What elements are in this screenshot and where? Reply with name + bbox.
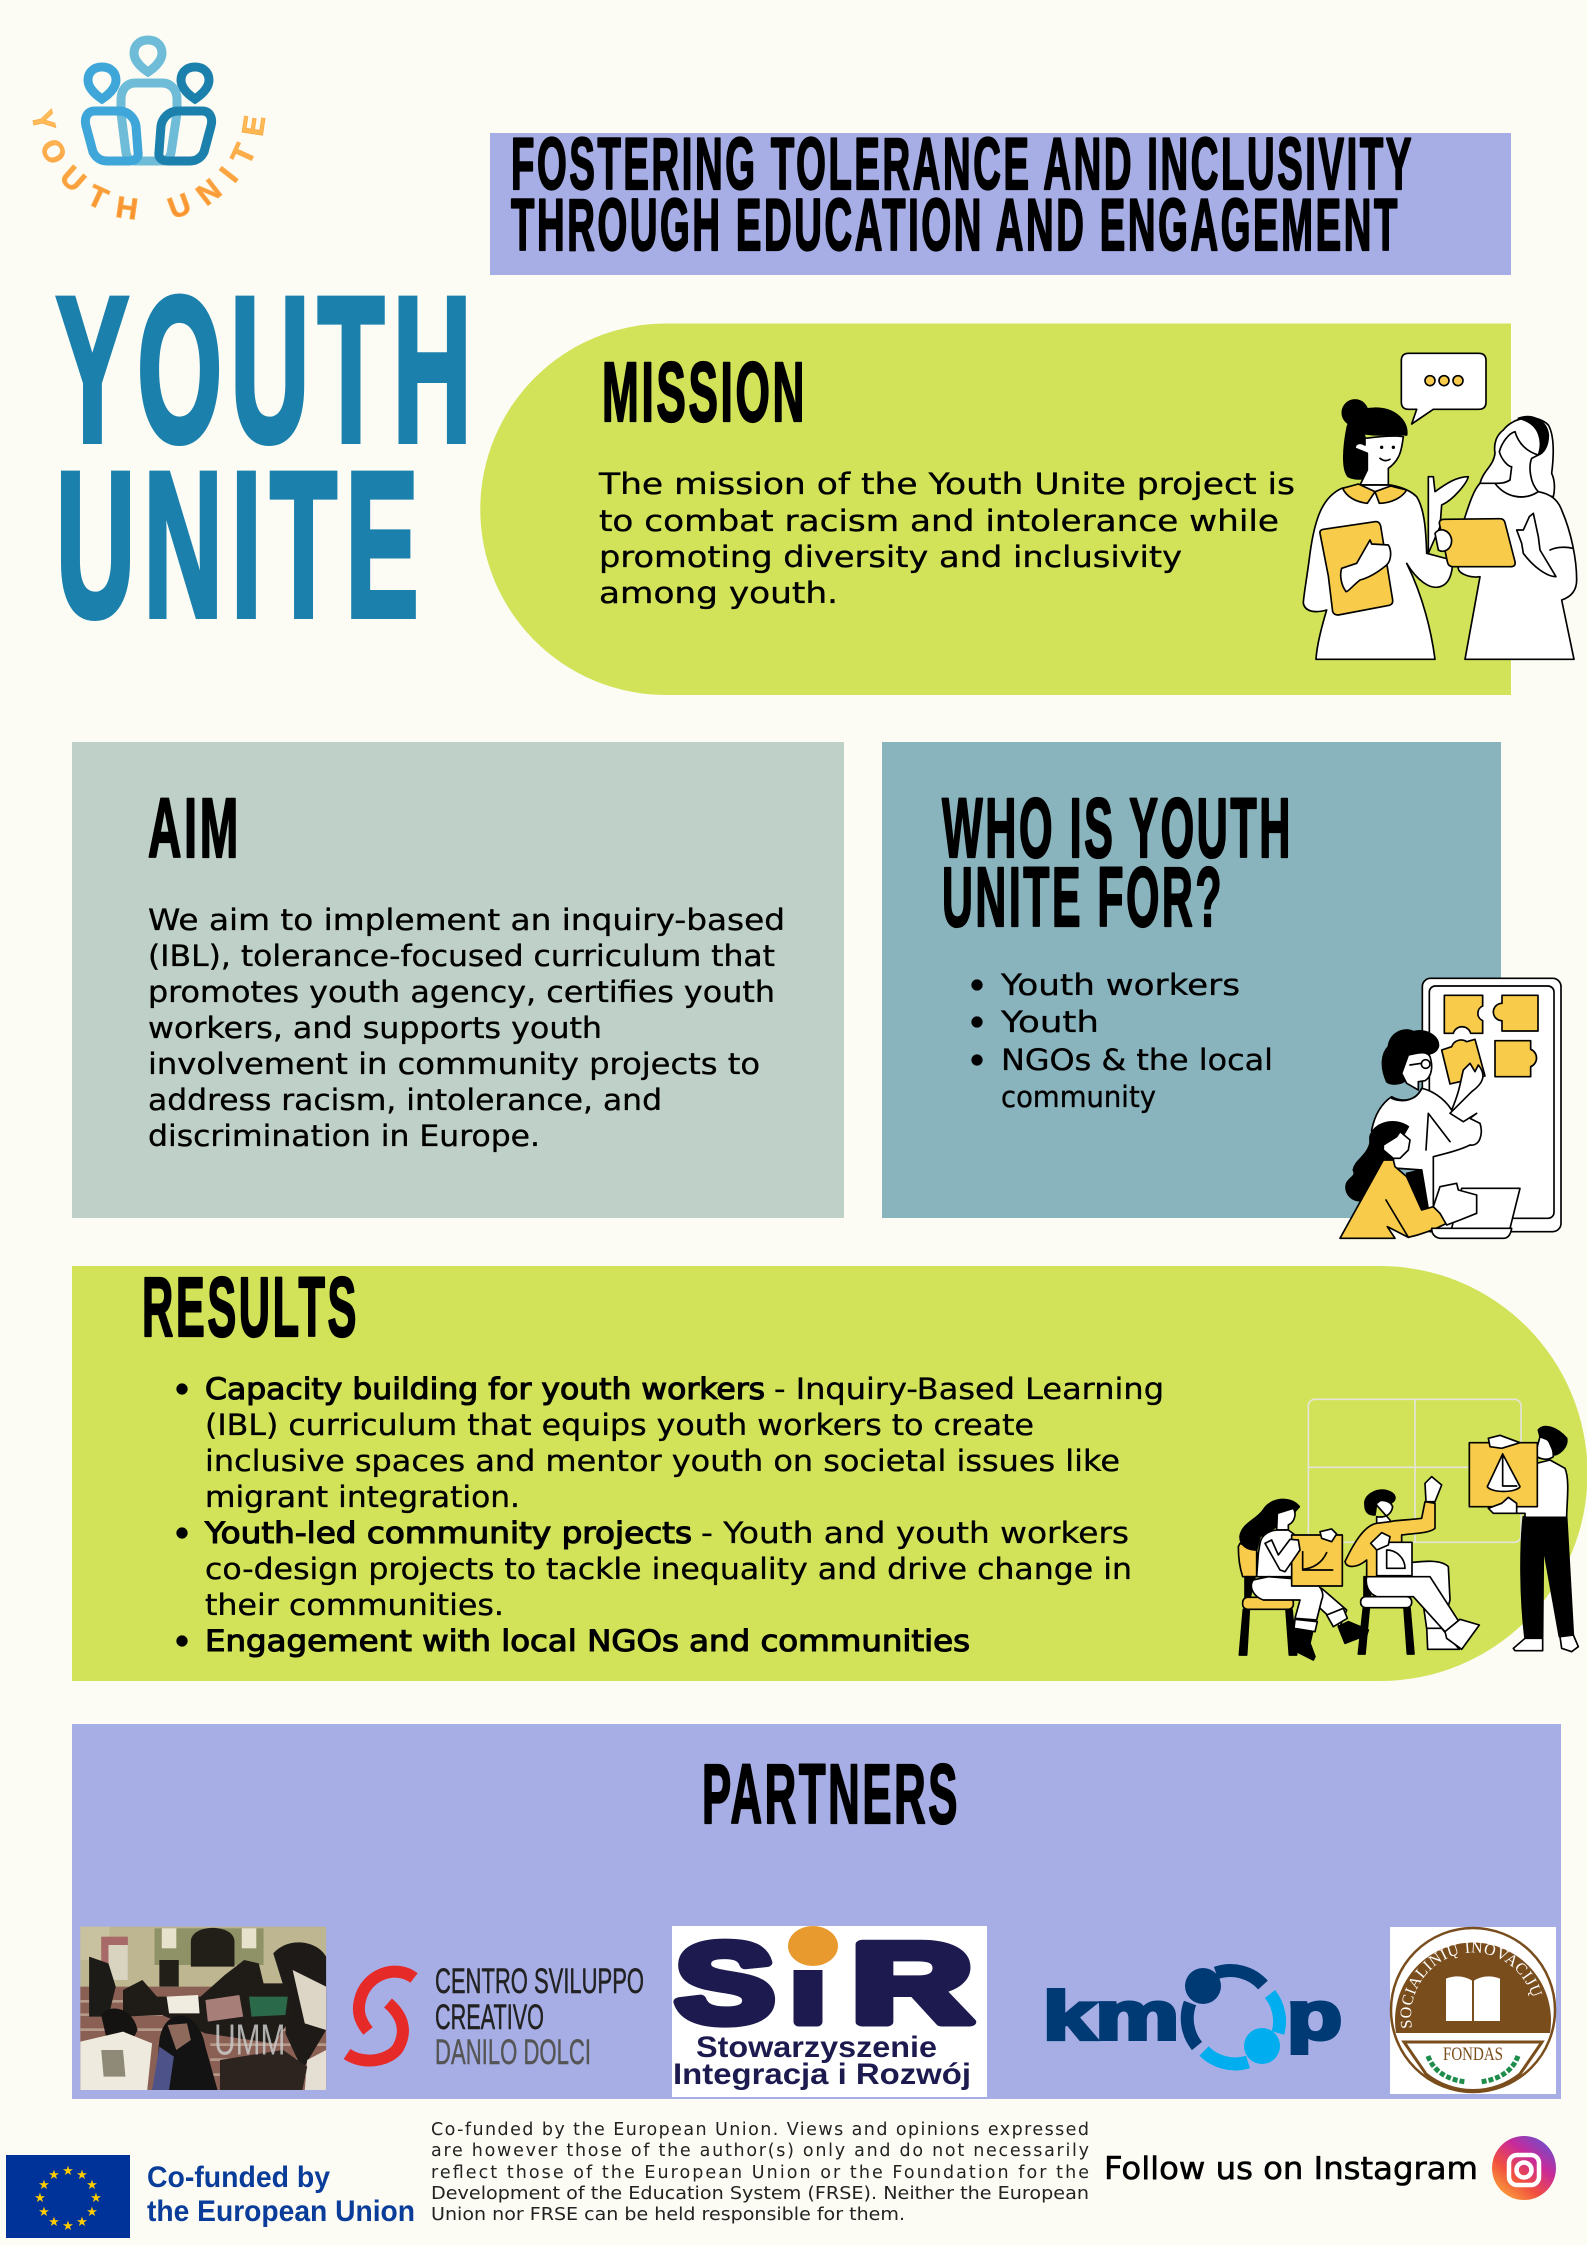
- results list: - Youth and youth workers: [701, 1516, 1129, 1550]
- panel: results: [72, 1260, 1587, 1681]
- results list: [176, 1372, 1164, 1658]
- co-funded label: [147, 2161, 415, 2228]
- who list: [972, 968, 1273, 1114]
- logo: UMM photo: [80, 1927, 326, 2090]
- logo: SIR: I: [790, 1920, 826, 2046]
- who heading: [942, 781, 1293, 944]
- panel: who is Youth Unite for: [882, 742, 1501, 1218]
- seated woman: [1238, 1543, 1257, 1577]
- aim text: promotes youth agency, certifies youth: [148, 975, 775, 1009]
- EU flag: ★: [90, 2191, 102, 2206]
- disclaimer text: Union nor FRSE can be held responsible for them.: [431, 2205, 905, 2225]
- EU flag: ★: [76, 2215, 88, 2230]
- mission text: to combat racism and intolerance while: [599, 504, 1279, 538]
- icon: open book: [1445, 1975, 1501, 2022]
- disclaimer text: Development of the Education System (FRSE). Neither the European: [431, 2184, 1089, 2204]
- logo: Socialiniu inovaciju fondas: SOCIALINIŲ INOVACIJŲ: [1400, 1942, 1542, 2028]
- who list: Youth: [1000, 1005, 1099, 1039]
- EU flag: ★: [86, 2178, 98, 2193]
- logo: SIR: [672, 1920, 987, 2097]
- co-funded label: the European Union: [147, 2195, 415, 2228]
- mission text: among youth.: [599, 576, 838, 610]
- who list: Youth workers: [1000, 968, 1240, 1002]
- results list: inclusive spaces and mentor youth on societal issues like: [205, 1444, 1120, 1478]
- who list: community: [1001, 1080, 1156, 1114]
- aim text: involvement in community projects to: [148, 1047, 760, 1081]
- co-funded label: Co-funded by: [147, 2161, 330, 2194]
- disclaimer text: reflect those of the European Union or the Foundation for the: [431, 2163, 1089, 2183]
- aim text: (IBL), tolerance-focused curriculum that: [148, 939, 775, 973]
- logo: Socialiniu inovaciju fondas: FONDAS: [1443, 2044, 1503, 2065]
- aim heading: AIM: [148, 781, 241, 875]
- EU flag: ★: [86, 2205, 98, 2220]
- illustration: two women talking: [1303, 353, 1577, 659]
- icon: speech bubble: [1401, 353, 1486, 424]
- results list: (IBL) curriculum that equips youth workers to create: [205, 1408, 1034, 1442]
- disclaimer text: [431, 2120, 1089, 2225]
- EU flag: ★: [38, 2205, 50, 2220]
- aim text: discrimination in Europe.: [148, 1119, 540, 1153]
- EU flag: ★: [34, 2191, 46, 2206]
- disclaimer text: are however those of the author(s) only and do not necessarily: [431, 2141, 1089, 2161]
- results list: Capacity building for youth workers: [205, 1372, 765, 1406]
- disclaimer text: Co-funded by the European Union. Views and opinions expressed: [431, 2120, 1089, 2140]
- title banner: [490, 124, 1511, 275]
- standing man: [1521, 1517, 1573, 1638]
- aim text: We aim to implement an inquiry-based: [148, 903, 785, 937]
- mission heading: MISSION: [602, 345, 807, 439]
- partners heading: PARTNERS: [702, 1747, 960, 1841]
- logo: KMOP: [1043, 1968, 1342, 2064]
- seated man: [1364, 1577, 1373, 1598]
- aim text: address racism, intolerance, and: [148, 1083, 662, 1117]
- results list: Youth-led community projects: [204, 1516, 692, 1550]
- logo wordmark: YOUTH UNITE: [32, 108, 266, 220]
- EU flag: ★: [48, 2168, 60, 2183]
- EU flag: ★: [62, 2164, 74, 2179]
- logo: KMOP: p: [1287, 1978, 1342, 2054]
- results heading: RESULTS: [142, 1260, 359, 1354]
- logo: Socialiniu inovaciju fondas: [1390, 1926, 1556, 2094]
- logo: SIR: Integracja i Rozwój: [673, 2058, 971, 2091]
- logo: Youth Unite: [32, 36, 266, 220]
- EU flag: ★: [62, 2219, 74, 2234]
- results list: migrant integration.: [205, 1480, 520, 1514]
- logo: KMOP: km: [1043, 1978, 1179, 2054]
- who list: NGOs & the local: [1001, 1043, 1273, 1077]
- main heading: Youth Unite: [56, 254, 480, 660]
- EU flag: [6, 2155, 130, 2238]
- logo: SIR: S: [675, 1920, 775, 2046]
- icon: instagram: [1492, 2136, 1556, 2200]
- who heading: UNITE FOR?: [942, 850, 1224, 944]
- results list: their communities.: [205, 1588, 504, 1622]
- mission text: The mission of the Youth Unite project is: [598, 467, 1295, 501]
- instagram follow: Follow us on Instagram: [1104, 2151, 1478, 2187]
- main heading: Youth Unite: YOUTH: [56, 254, 480, 485]
- main heading: Youth Unite: UNITE: [56, 429, 427, 660]
- logo: Centro Sviluppo Creativo Danilo Dolci: DANILO DOLCI: [435, 2033, 591, 2072]
- logo: SIR: R: [851, 1920, 973, 2046]
- panel: mission: [480, 324, 1511, 695]
- logo: UMM photo: UMM: [214, 2016, 285, 2064]
- logo: Centro Sviluppo Creativo Danilo Dolci: [347, 1962, 644, 2072]
- aim text: workers, and supports youth: [148, 1011, 602, 1045]
- EU flag: ★: [38, 2178, 50, 2193]
- illustration: puzzle board: [1340, 978, 1561, 1238]
- logo: Centro Sviluppo Creativo Danilo Dolci: CREATIVO: [435, 1998, 544, 2037]
- results list: - Inquiry-Based Learning: [774, 1372, 1164, 1406]
- mission text: promoting diversity and inclusivity: [599, 540, 1182, 574]
- panel: aim: [72, 742, 844, 1218]
- EU flag: ★: [76, 2168, 88, 2183]
- logo: Centro Sviluppo Creativo Danilo Dolci: CENTRO SVILUPPO: [435, 1962, 644, 2001]
- illustration: youth workshop: [1238, 1399, 1578, 1660]
- aim text: [148, 903, 785, 1153]
- EU flag: ★: [48, 2215, 60, 2230]
- results list: Engagement with local NGOs and communities: [205, 1624, 970, 1658]
- panel: partners: [72, 1724, 1561, 2099]
- logo: SIR: Stowarzyszenie: [696, 2031, 937, 2064]
- results list: co-design projects to tackle inequality and drive change in: [205, 1552, 1132, 1586]
- mission text: [598, 467, 1295, 610]
